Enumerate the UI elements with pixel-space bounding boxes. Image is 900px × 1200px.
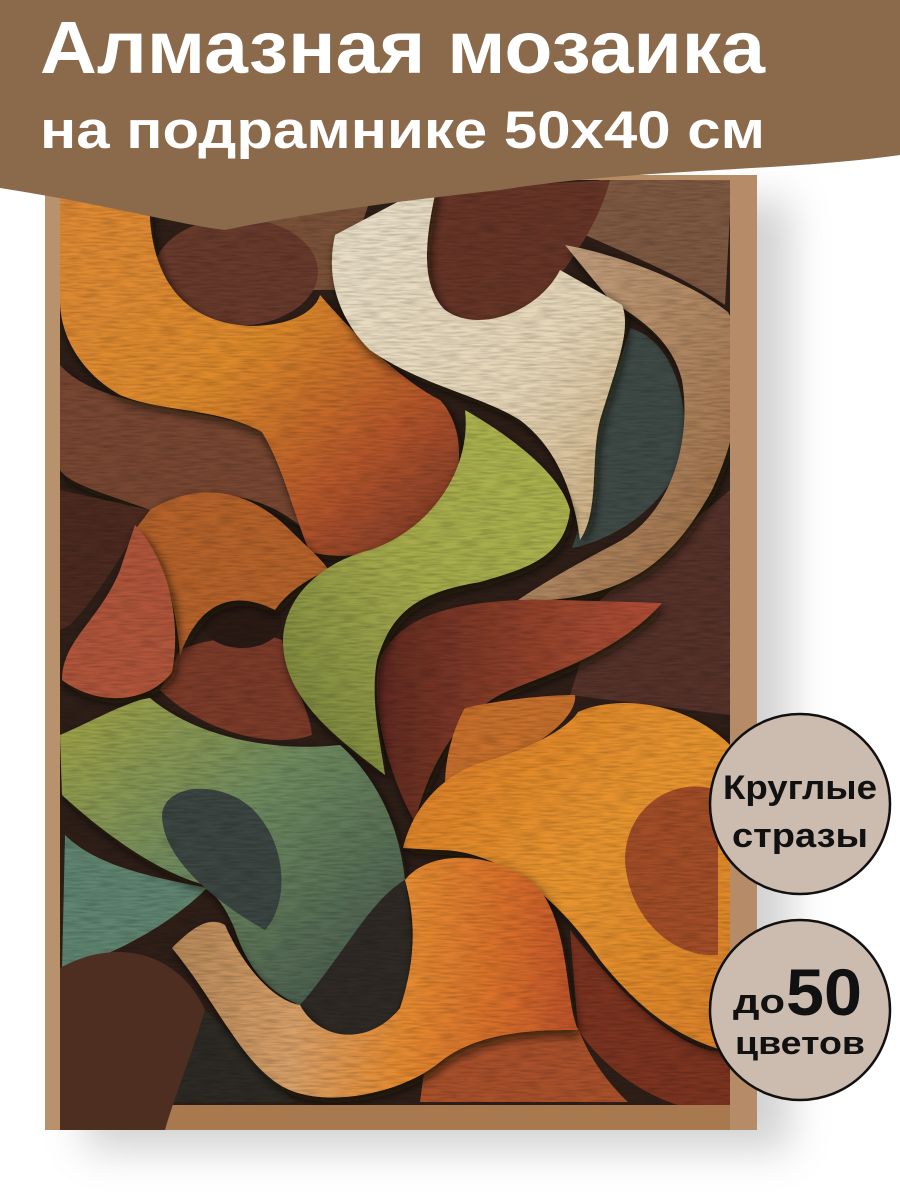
orange brown mid-left <box>135 493 328 655</box>
tan ribbon <box>518 245 741 600</box>
top-left orange swirl <box>60 185 459 556</box>
top brown piece <box>266 206 368 290</box>
terracotta left piece <box>62 525 175 698</box>
wooden frame <box>45 175 757 1130</box>
header banner <box>0 0 900 230</box>
badge: up to 50 colours: цветов <box>735 1025 865 1061</box>
artwork panel <box>60 178 741 1115</box>
subtitle: на подрамнике 50х40 см <box>40 101 765 160</box>
right dark wood <box>570 490 730 715</box>
dark slate oval <box>162 789 281 930</box>
dark hollow <box>213 636 274 648</box>
dark lower centre <box>300 880 411 1036</box>
dark wood circle <box>154 218 318 326</box>
canvas shadow <box>85 200 790 1150</box>
badge: up to 50 colours <box>710 920 890 1100</box>
dark bottom left <box>60 952 205 1130</box>
top centre dark wood <box>424 180 610 322</box>
olive green swirl <box>283 410 570 775</box>
green left swirl <box>60 698 405 1006</box>
slate piece <box>572 328 685 548</box>
mosaic artwork canvas <box>45 175 757 1130</box>
badge: up to 50 colours: до <box>733 983 785 1021</box>
top right brown piece <box>585 178 732 305</box>
left mid brown piece <box>60 365 305 530</box>
badge: up to 50 colours: 50 <box>786 955 862 1029</box>
badge: round rhinestones: стразы <box>732 817 868 855</box>
small orange piece <box>445 695 575 785</box>
badge: round rhinestones <box>710 714 890 894</box>
brown circle right <box>625 786 718 955</box>
bottom middle orange-brown <box>420 1027 628 1102</box>
lower orange and tan ribbon <box>172 858 578 1097</box>
cream swirl <box>332 190 625 540</box>
red-brown swirl <box>377 600 662 822</box>
teal lower-left <box>62 835 207 970</box>
title: Алмазная мозаика <box>40 6 766 89</box>
wood grain texture <box>60 180 730 1105</box>
dark wood left <box>60 490 150 630</box>
bottom dark piece <box>170 1010 295 1102</box>
lower right red brown <box>570 930 730 1115</box>
badge: round rhinestones: Круглые <box>723 769 877 807</box>
right orange swirl <box>403 703 730 1052</box>
red-brown lower curve <box>160 636 312 740</box>
